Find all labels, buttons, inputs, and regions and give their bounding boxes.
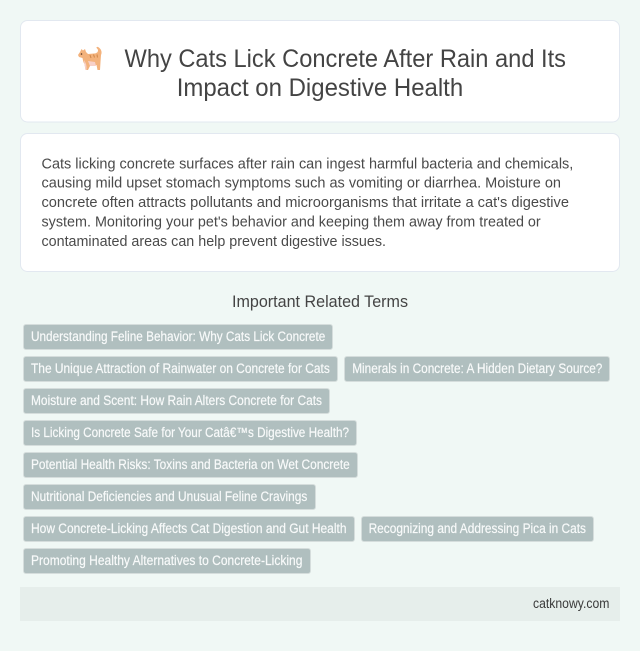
description text: causing mild upset stomach symptoms such as vomiting or diarrhea. Moisture on [42, 175, 561, 192]
description text [42, 155, 573, 250]
description text: system. Monitoring your pet's behavior and keeping them away from treated or [42, 214, 541, 231]
tag 4: Moisture and Scent: How Rain Alters Concrete for Cats [31, 393, 322, 408]
tag 7 [24, 484, 316, 510]
tag 2: The Unique Attraction of Rainwater on Concrete for Cats [31, 361, 330, 376]
footer site name: catknowy.com [533, 596, 609, 611]
tag list [24, 324, 610, 574]
icon: cat [78, 47, 102, 70]
panel: description card [20, 134, 620, 272]
description text: Cats licking concrete surfaces after rain can ingest harmful bacteria and chemicals, [42, 155, 573, 172]
panel: title card [20, 20, 620, 122]
description text: concrete often attracts pollutants and microorganisms that irritate a cat's digestive [42, 194, 569, 211]
tag 5 [24, 420, 356, 446]
tag 9: Recognizing and Addressing Pica in Cats [369, 521, 586, 536]
tag 10: Promoting Healthy Alternatives to Concrete-Licking [31, 553, 302, 568]
tag 7: Nutritional Deficiencies and Unusual Feline Cravings [31, 489, 308, 504]
tag 3: Minerals in Concrete: A Hidden Dietary Source? [352, 361, 602, 376]
tag 8 [24, 516, 354, 542]
tag 4 [24, 388, 330, 414]
tag 2 [24, 356, 338, 382]
footer bar [20, 587, 620, 621]
tag 5: Is Licking Concrete Safe for Your Catâ€™s Digestive Health? [31, 425, 349, 440]
tag 6: Potential Health Risks: Toxins and Bacteria on Wet Concrete [31, 457, 350, 472]
tag 8: How Concrete-Licking Affects Cat Digestion and Gut Health [31, 521, 346, 536]
tag 9 [362, 516, 594, 542]
tag 10 [24, 548, 310, 574]
tag 1: Understanding Feline Behavior: Why Cats Lick Concrete [31, 329, 325, 344]
title line 2: Impact on Digestive Health [177, 74, 463, 102]
tag 1 [24, 324, 332, 350]
tag 6 [24, 452, 358, 478]
description text: contaminated areas can help prevent digestive issues. [42, 233, 386, 250]
title line 1: Why Cats Lick Concrete After Rain and Its [124, 45, 566, 73]
tag 3 [344, 356, 610, 382]
heading: related terms: Important Related Terms [232, 292, 408, 311]
